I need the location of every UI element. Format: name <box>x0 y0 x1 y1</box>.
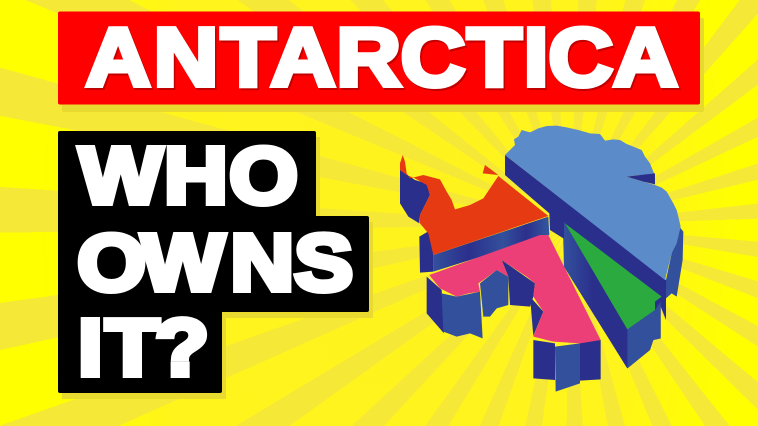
pink sector top <box>429 235 601 343</box>
question panel: WHO OWNS IT?: IT? <box>78 303 209 392</box>
question panel: WHO OWNS IT?: OWNS <box>77 218 353 307</box>
red peninsula sector top <box>400 155 548 255</box>
green sector top <box>565 223 662 329</box>
pink sector walls <box>427 260 601 392</box>
red sector walls <box>400 170 549 273</box>
east sector side walls <box>505 155 683 368</box>
notch shadow <box>627 173 655 184</box>
blue east sector top <box>505 126 681 280</box>
map: Antarctica split into territories <box>400 126 683 392</box>
red island <box>483 165 498 175</box>
question panel: WHO OWNS IT?: WHO <box>79 131 298 220</box>
question panel: WHO OWNS IT? <box>58 131 373 399</box>
title banner: ANTARCTICA: ANTARCTICA <box>86 12 678 104</box>
title banner: ANTARCTICA: ANTARCTICA <box>87 14 679 106</box>
